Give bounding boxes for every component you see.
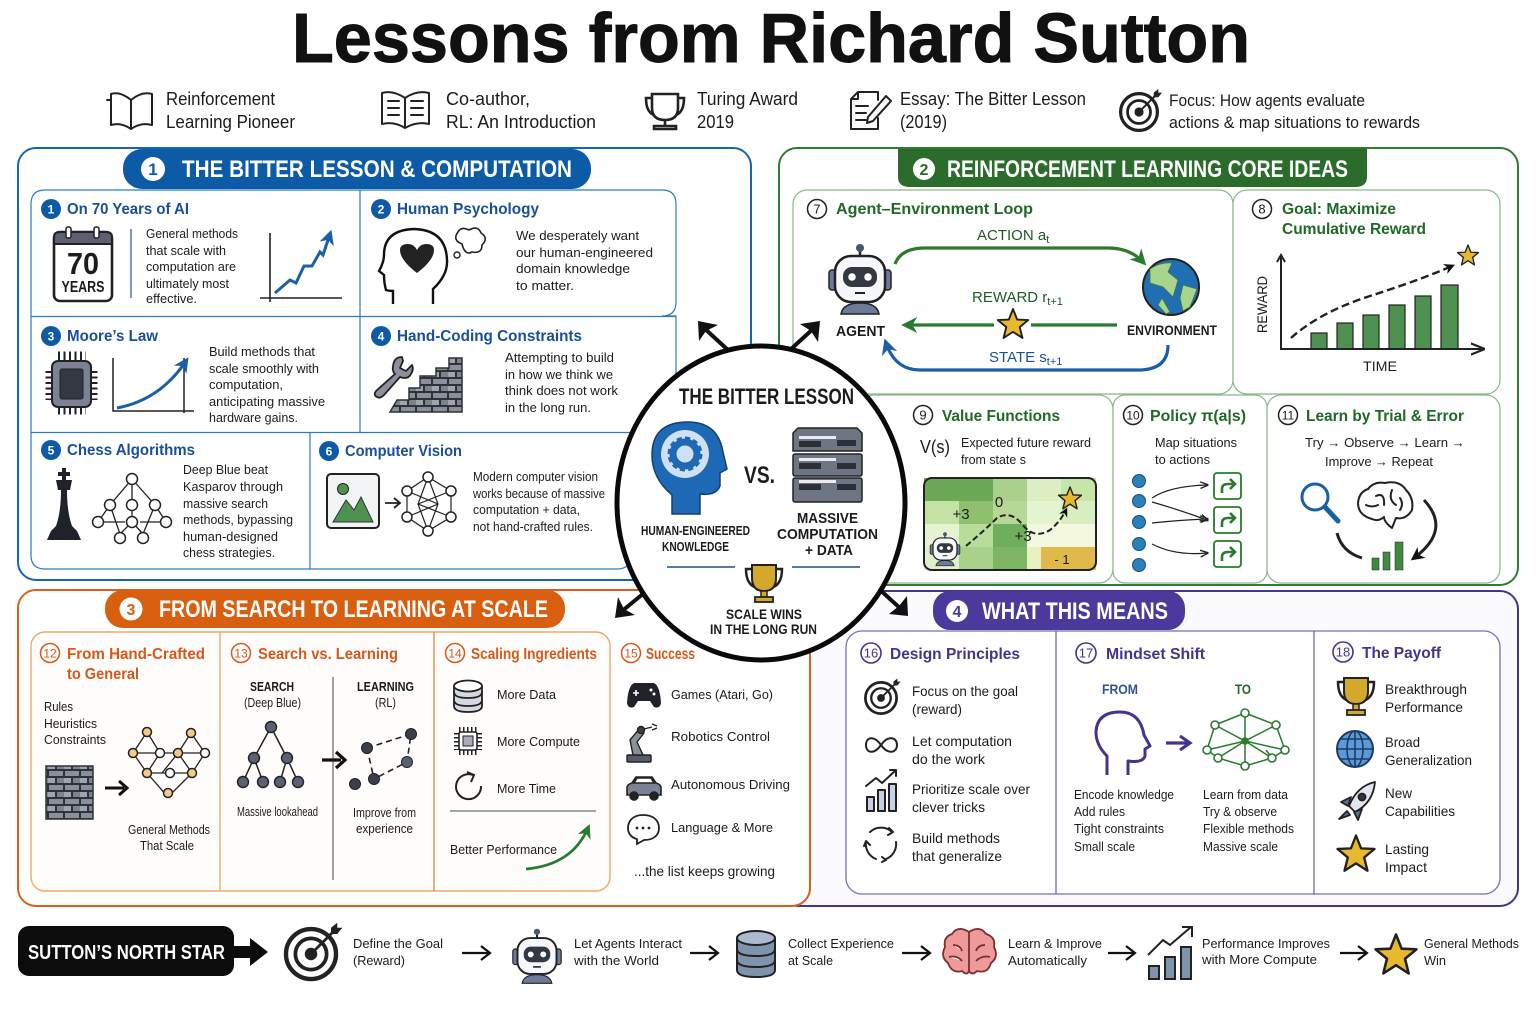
card: mindset shift: Small scale [1074, 839, 1135, 854]
inner card outline [846, 631, 1500, 894]
card: design principles: Prioritize scale over [912, 781, 1030, 797]
card: search vs learning: Massive lookahead [237, 805, 318, 819]
step: general methods win: General Methods [1424, 936, 1519, 951]
inner card outline [31, 632, 610, 891]
icon: globe [1337, 731, 1373, 767]
text block: methods, bypassing [183, 512, 293, 527]
card: mindset shift: TO [1235, 681, 1251, 697]
card: value functions: 9 [919, 408, 927, 422]
card: design principles: Build methods [912, 830, 1000, 846]
icon: neural network [402, 472, 456, 536]
card: agent-environment loop: t+1 [1047, 356, 1062, 368]
card: policy: 10 [1126, 408, 1140, 422]
icon: earth environment [1143, 259, 1199, 315]
card: from hand-crafted to general: to General [67, 666, 139, 683]
card: success: Games (Atari, Go) [671, 687, 773, 702]
text block: Modern computer vision [473, 470, 598, 484]
credential: reinforcement learning pioneer [166, 89, 295, 132]
card: value functions: Expected future reward [961, 435, 1091, 450]
arrow: state [886, 343, 1168, 370]
credential: focus: Focus: How agents evaluate [1169, 91, 1365, 110]
icon: head with heart and thought bubble [379, 228, 485, 304]
card: moore's law: 3 [48, 330, 55, 344]
card: hand-coding constraints [371, 326, 618, 415]
card: mindset shift: Massive scale [1203, 839, 1278, 854]
icon: trophy outline [646, 94, 684, 129]
arrow: to panel 3 [615, 588, 650, 618]
card: search vs learning: 13 [234, 646, 248, 660]
card: the payoff: New [1385, 785, 1413, 801]
step: let agents interact: with the World [573, 953, 659, 968]
card: mindset shift: Add rules [1074, 804, 1125, 819]
icon: speech bubble [628, 815, 659, 844]
text block: think does not work [505, 383, 618, 398]
icon: chess king [47, 468, 81, 540]
icon: robot arm [627, 724, 657, 762]
icon: 70 years calendar: 70 [67, 246, 99, 281]
inner card outlines [793, 190, 1500, 583]
text block: our human-engineered [516, 245, 653, 260]
icon: neural network [1207, 713, 1285, 766]
section 4 header: WHAT THIS MEANS [982, 598, 1168, 625]
icon: chip [457, 730, 479, 752]
arrow [1108, 946, 1135, 960]
step: let agents interact [513, 929, 682, 983]
arrow: reward [906, 323, 1117, 327]
arrow [1166, 736, 1190, 750]
text block: scale smoothly with [209, 361, 319, 376]
text block: computation are [146, 259, 236, 274]
card: the payoff: 18 [1336, 644, 1350, 660]
central circle: the bitter lesson: IN THE LONG RUN [710, 621, 817, 637]
card: moore's law [41, 326, 325, 425]
arrow: loop left [1337, 533, 1362, 558]
chart: cumulative reward bars: TIME [1363, 358, 1397, 374]
text block: domain knowledge [516, 261, 630, 276]
card: from hand-crafted to general: Rules [44, 699, 73, 714]
card: on 70 years of AI: On 70 Years of AI [67, 201, 189, 218]
card: success: Robotics Control [671, 729, 770, 744]
card: search vs learning: Improve from [353, 806, 416, 820]
section 4 header: 4 [953, 604, 962, 621]
card: learn by trial and error: 11 [1282, 408, 1295, 422]
text block: not hand-crafted rules. [473, 520, 593, 534]
central circle: the bitter lesson: KNOWLEDGE [662, 539, 729, 554]
step: collect experience: Collect Experience [788, 936, 894, 951]
card: from hand-crafted to general: From Hand-Crafted [67, 646, 205, 663]
icon: book [107, 93, 152, 129]
card: hand-coding constraints: 4 [378, 330, 385, 344]
card: success [622, 644, 790, 879]
text block: chess strategies. [183, 545, 275, 560]
card: learn by trial and error: Learn by Trial & Error [1306, 408, 1464, 425]
chart: exponential curve [113, 358, 194, 413]
arrow: to panel 2 [790, 321, 820, 350]
step: define the goal: (Reward) [353, 953, 405, 968]
step: define the goal [286, 923, 443, 979]
card: scaling ingredients: Scaling Ingredients [471, 646, 597, 663]
icon: bars [1372, 542, 1403, 570]
central circle: the bitter lesson: HUMAN-ENGINEERED [641, 523, 750, 538]
text block: Kasparov through [183, 479, 283, 494]
card: goal: Goal: Maximize [1282, 201, 1396, 218]
card: design principles [861, 643, 1030, 864]
arrow [690, 946, 718, 960]
card: design principles: (reward) [912, 701, 962, 717]
icon: gold trophy [1338, 678, 1374, 715]
icon: circular arrow [456, 772, 481, 799]
card: search vs learning: (RL) [375, 696, 396, 710]
step: general methods win [1376, 934, 1519, 973]
section 3 header [105, 590, 565, 628]
arrow [385, 498, 400, 508]
chart: learning path [350, 728, 416, 790]
card: mindset shift: 17 [1079, 646, 1093, 660]
central circle: the bitter lesson [617, 346, 905, 660]
card: from hand-crafted to general [40, 644, 210, 853]
card: mindset shift: Mindset Shift [1106, 646, 1206, 663]
icon: server stack [793, 428, 862, 502]
arrow [902, 946, 930, 960]
chart: value heatmap: +3 [1014, 528, 1032, 545]
card: goal [1252, 200, 1482, 374]
card: the payoff: Performance [1385, 699, 1463, 715]
card: hand-coding constraints: Hand-Coding Constraints [397, 328, 582, 345]
card: scaling ingredients: 14 [448, 646, 462, 660]
panel: what this means [780, 591, 1518, 906]
section 2 header: REINFORCEMENT LEARNING CORE IDEAS [947, 156, 1348, 183]
icon: star [1337, 836, 1375, 871]
card: design principles: clever tricks [912, 799, 985, 815]
arrow [462, 946, 490, 960]
card: policy: Map situations [1155, 435, 1237, 450]
arrow: loop right [1414, 500, 1436, 558]
icon: gamepad [627, 683, 661, 708]
credential: focus: actions & map situations to rewards [1169, 113, 1420, 132]
card: from hand-crafted to general: 12 [43, 646, 57, 660]
icon: rocket [1339, 782, 1375, 820]
arrow [322, 752, 345, 768]
card: the payoff: Capabilities [1385, 803, 1455, 819]
card: from hand-crafted to general: That Scale [140, 839, 194, 853]
credential: essay [900, 89, 1086, 132]
card: success: Language & More [671, 820, 773, 835]
icon: network [128, 728, 210, 798]
step: collect experience: at Scale [788, 953, 833, 968]
card: learn by trial and error: Improve → Repeat [1325, 454, 1433, 469]
card: agent-environment loop: t [1046, 234, 1049, 246]
step: performance improves [1148, 927, 1330, 979]
text block [146, 226, 238, 306]
card: agent-environment loop [808, 200, 1217, 370]
card: agent-environment loop: ENVIRONMENT [1127, 322, 1217, 338]
text block: effective. [146, 291, 197, 306]
card: success: Autonomous Driving [671, 777, 790, 792]
card: scaling ingredients [446, 644, 597, 869]
chart: cumulative reward bars: REWARD [1254, 276, 1270, 333]
card: search vs learning: SEARCH [250, 679, 294, 694]
text block: massive search [183, 496, 268, 511]
card: agent-environment loop: 7 [813, 202, 821, 216]
card: scaling ingredients: More Time [497, 781, 556, 796]
arrow: to panel 1 [698, 321, 728, 350]
chart: value heatmap: 0 [995, 494, 1003, 511]
text block: human-designed [183, 529, 278, 544]
icon: 70 years calendar [54, 227, 112, 301]
card: goal: 8 [1258, 202, 1266, 216]
card: value functions: from state s [961, 452, 1026, 467]
card: scaling ingredients: More Compute [497, 734, 580, 749]
text block [209, 344, 325, 425]
icon: infinity [866, 738, 897, 752]
arrow [234, 938, 268, 966]
card: mindset shift [1074, 643, 1294, 854]
card: policy: Policy π(a|s) [1150, 408, 1246, 425]
credential: co-author: Co-author, [446, 89, 530, 109]
section 4 header [933, 591, 1185, 630]
section 3 header: FROM SEARCH TO LEARNING AT SCALE [159, 596, 548, 623]
central circle: the bitter lesson: + DATA [805, 542, 853, 559]
step: collect experience [737, 931, 894, 977]
panel: from search to learning at scale [18, 590, 810, 906]
card: the payoff: Breakthrough [1385, 681, 1467, 697]
icon: cycle [864, 828, 896, 862]
text block: computation + data, [473, 503, 580, 517]
credential: turing award [697, 89, 798, 132]
icon: brain [1358, 482, 1412, 528]
card: design principles: Focus on the goal [912, 683, 1018, 699]
card: computer vision [319, 441, 605, 536]
icon: brick wall [46, 766, 93, 819]
card: mindset shift: Encode knowledge [1074, 787, 1174, 802]
credentials row [107, 89, 1420, 132]
card: computer vision: Computer Vision [345, 443, 462, 460]
text block [505, 350, 618, 415]
credential: essay: Essay: The Bitter Lesson [900, 89, 1086, 109]
central circle: the bitter lesson: MASSIVE [797, 510, 858, 527]
card: search vs learning: (Deep Blue) [244, 696, 301, 710]
card: the payoff: Impact [1385, 859, 1427, 875]
card: value functions: V(s) [920, 437, 950, 457]
card: design principles: 16 [864, 646, 878, 660]
card: the payoff: Generalization [1385, 752, 1472, 768]
step: learn and improve [943, 929, 1102, 974]
icon: reward star [998, 309, 1028, 338]
card: the payoff: Lasting [1385, 841, 1429, 857]
card: agent-environment loop: REWARD r [972, 289, 1047, 306]
card: learn by trial and error: Try → Observe → Learn → [1305, 435, 1465, 450]
step: performance improves: with More Compute [1201, 952, 1317, 967]
central circle: the bitter lesson: COMPUTATION [777, 526, 878, 543]
card: computer vision: 6 [326, 444, 333, 458]
section 1 header: 1 [148, 160, 158, 179]
card: goal: Cumulative Reward [1282, 221, 1426, 238]
section 1 header [123, 149, 591, 189]
icon: 70 years calendar: YEARS [62, 279, 105, 296]
chart: cumulative reward bars [1254, 245, 1482, 374]
text block: in the long run. [505, 400, 591, 415]
chart: value heatmap: - 1 [1054, 552, 1070, 567]
icon: open book [382, 92, 429, 128]
inner card outlines [31, 190, 676, 569]
card: design principles: Design Principles [890, 646, 1020, 663]
card: search vs learning: experience [356, 822, 413, 836]
card: human psychology: Human Psychology [397, 201, 539, 218]
card: on 70 years of AI: 1 [48, 202, 55, 216]
icon: wrench [375, 357, 413, 398]
chart: rising line [260, 233, 342, 302]
text block: to matter. [516, 278, 574, 293]
panel: the bitter lesson and computation [18, 148, 751, 580]
credential: turing award: 2019 [697, 112, 734, 132]
icon: essay page with pen [851, 92, 891, 129]
arrow: to panel 4 [878, 588, 908, 616]
card: the payoff: The Payoff [1362, 645, 1442, 662]
card: learn by trial and error [1278, 406, 1465, 570]
text block: Attempting to build [505, 350, 614, 365]
card: value functions [914, 406, 1096, 570]
section 3 header: 3 [127, 602, 136, 619]
card: human psychology [371, 199, 653, 304]
credential: co-author [446, 89, 596, 132]
card: moore's law: Moore’s Law [67, 328, 159, 345]
icon: robot agent [829, 244, 891, 314]
credential: focus [1169, 91, 1420, 132]
card: design principles: Let computation [912, 733, 1012, 749]
icon: rising bars [866, 770, 896, 811]
card: policy: to actions [1155, 452, 1210, 467]
banner: sutton's north star [18, 926, 268, 976]
card: from hand-crafted to general: Constraints [44, 732, 106, 747]
section 1 header: THE BITTER LESSON & COMPUTATION [182, 156, 572, 183]
card: chess algorithms: Chess Algorithms [67, 442, 195, 459]
text block: anticipating massive [209, 394, 325, 409]
card: mindset shift: Try & observe [1203, 804, 1277, 819]
step: performance improves: Performance Improves [1202, 936, 1330, 951]
card: from hand-crafted to general: General Methods [128, 823, 210, 837]
card: policy [1124, 406, 1246, 572]
text block [516, 228, 653, 293]
arrow [1340, 946, 1367, 960]
card: search vs learning [232, 644, 416, 880]
text block: ultimately most [146, 276, 229, 291]
arrow: action [895, 248, 1143, 264]
icon: magnifying glass [1302, 484, 1338, 521]
card: mindset shift: Flexible methods [1203, 821, 1294, 836]
card: scaling ingredients: More Data [497, 687, 557, 702]
card: scaling ingredients: Better Performance [450, 842, 557, 857]
card: mindset shift: Tight constraints [1074, 821, 1164, 836]
credential: reinforcement learning pioneer: Learning Pioneer [166, 112, 295, 132]
text block: that scale with [146, 243, 226, 258]
card: search vs learning: Search vs. Learning [258, 646, 398, 663]
icon: human head with gear [652, 422, 727, 514]
step: general methods win: Win [1424, 953, 1446, 968]
card: success: ...the list keeps growing [634, 863, 775, 879]
icon: microchip [50, 356, 93, 410]
text block: We desperately want [516, 228, 639, 243]
card: agent-environment loop: STATE s [989, 349, 1047, 366]
credential: turing award: Turing Award [697, 89, 798, 109]
central circle: the bitter lesson: SCALE WINS [726, 606, 802, 622]
card: value functions: Value Functions [942, 408, 1060, 425]
chart: value heatmap: +3 [952, 506, 970, 523]
card: on 70 years of AI [41, 199, 342, 306]
chart: state-to-action mapping [1132, 473, 1241, 572]
text block: computation, [209, 377, 283, 392]
icon: database [454, 680, 482, 712]
section 2 header: 2 [920, 162, 929, 179]
card: from hand-crafted to general: Heuristics [44, 716, 97, 731]
arrow [105, 781, 127, 795]
card: success: Success [646, 646, 695, 663]
text block [472, 470, 605, 534]
text block: Build methods that [209, 344, 315, 359]
title: Lessons from Richard Sutton [292, 0, 1250, 77]
card: agent-environment loop: ACTION a [977, 227, 1046, 244]
credential: co-author: RL: An Introduction [446, 112, 596, 132]
card: search vs learning: LEARNING [357, 679, 414, 694]
card: success: 15 [624, 646, 638, 660]
icon: target [1121, 89, 1162, 130]
text block: in how we think we [505, 367, 613, 382]
section 2 header [898, 149, 1367, 187]
card: chess algorithms: 5 [48, 444, 55, 458]
text block: Deep Blue beat [183, 462, 268, 477]
icon: target [865, 678, 900, 714]
chart: game tree [92, 474, 172, 544]
card: agent-environment loop: AGENT [836, 323, 885, 340]
card: the payoff: Broad [1385, 734, 1420, 750]
chart: value heatmap [924, 478, 1096, 570]
card: mindset shift: FROM [1102, 681, 1138, 697]
card: chess algorithms [41, 440, 293, 560]
panel: reinforcement learning core ideas [779, 148, 1518, 585]
text block: works because of massive [472, 487, 605, 501]
icon: car [627, 777, 661, 800]
icon: image [327, 474, 379, 528]
icon: trophy [746, 565, 782, 602]
step: learn and improve: Automatically [1008, 953, 1088, 968]
icon: brick staircase [390, 358, 462, 412]
arrow: performance up [526, 828, 588, 869]
step: define the goal: Define the Goal [353, 936, 443, 951]
step: let agents interact: Let Agents Interact [574, 936, 682, 951]
credential: reinforcement learning pioneer: Reinforcement [166, 89, 275, 109]
text block: General methods [146, 226, 238, 241]
card: agent-environment loop: Agent–Environment Loop [836, 201, 1033, 218]
credential: essay: (2019) [900, 112, 947, 132]
card: human psychology: 2 [378, 202, 385, 216]
icon: human head [1096, 712, 1150, 775]
card: design principles: that generalize [912, 848, 1002, 864]
step: learn and improve: Learn & Improve [1008, 936, 1102, 951]
chart: search tree [238, 722, 304, 788]
text block: hardware gains. [209, 410, 298, 425]
card: mindset shift: Learn from data [1203, 787, 1289, 802]
central circle: the bitter lesson: THE BITTER LESSON [679, 384, 854, 409]
card: the payoff [1333, 642, 1472, 875]
banner: sutton's north star: SUTTON’S NORTH STAR [28, 942, 225, 964]
card: design principles: do the work [912, 751, 986, 767]
text block [183, 462, 293, 560]
card: agent-environment loop: t+1 [1047, 296, 1063, 308]
central circle: the bitter lesson: VS. [744, 462, 775, 489]
